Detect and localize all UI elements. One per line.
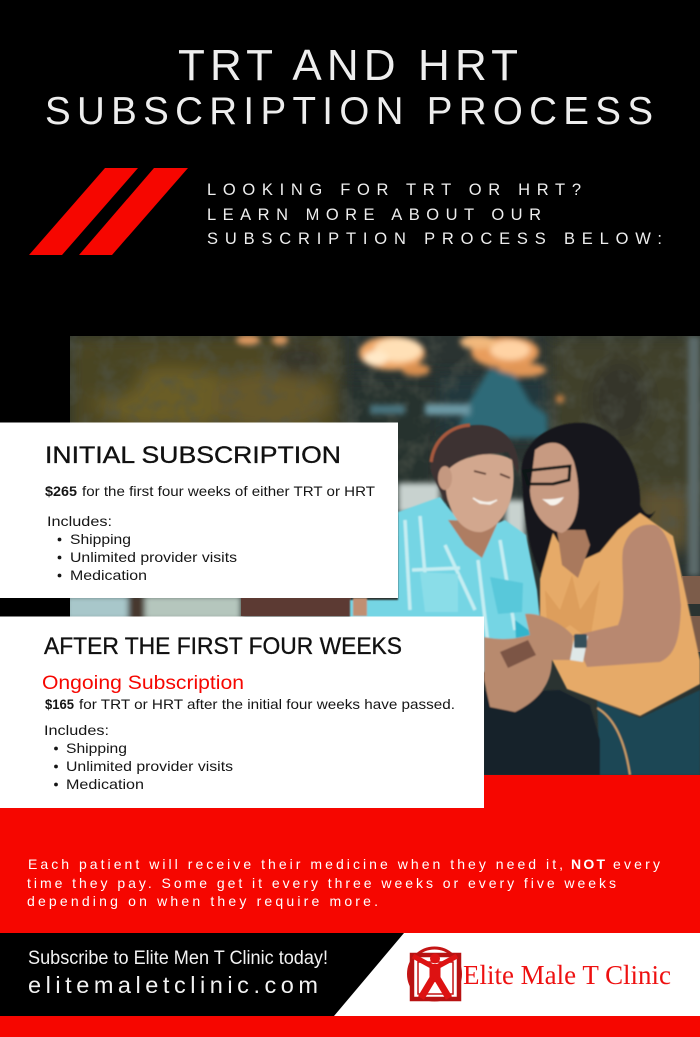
subtitle xyxy=(207,181,662,248)
panel: initial subscription xyxy=(0,422,398,598)
price line: $165 xyxy=(45,696,74,712)
note: medicine timing: NOT xyxy=(571,856,605,872)
includes list: Medication xyxy=(70,567,147,583)
includes list: Shipping xyxy=(70,531,131,547)
panel: after the first four weeks xyxy=(0,616,484,808)
watch xyxy=(570,634,588,662)
right jeans xyxy=(597,690,700,775)
subtitle: LEARN MORE ABOUT OUR xyxy=(207,206,541,224)
includes list: Shipping xyxy=(66,740,127,756)
hands xyxy=(484,614,573,712)
includes list: Includes: xyxy=(47,513,112,529)
right woman face xyxy=(530,443,578,533)
icon: red diagonal stripes xyxy=(29,168,188,255)
left woman neck xyxy=(448,520,498,558)
subtitle: LOOKING FOR TRT OR HRT? xyxy=(207,181,581,199)
price line: for TRT or HRT after the initial four weeks have passed. xyxy=(79,696,455,712)
note: medicine timing: depending on when they require more. xyxy=(27,893,378,909)
right woman hair xyxy=(521,423,656,585)
footer red band xyxy=(0,775,700,1037)
right woman neck xyxy=(557,530,590,578)
note: medicine timing: every xyxy=(613,856,660,872)
title xyxy=(45,41,653,133)
includes list xyxy=(44,722,233,792)
left woman shirt xyxy=(350,497,542,672)
heading: initial subscription: INITIAL SUBSCRIPTION xyxy=(45,442,341,469)
website: elitemaletclinic.com xyxy=(28,972,318,998)
includes list: Unlimited provider visits xyxy=(70,549,237,565)
title: SUBSCRIPTION PROCESS xyxy=(45,90,653,133)
footer: white logo area xyxy=(334,933,700,1016)
price line: $265 xyxy=(45,483,77,499)
bench xyxy=(682,576,700,652)
right woman arm xyxy=(573,525,681,667)
includes list xyxy=(47,513,237,583)
includes list: Medication xyxy=(66,776,144,792)
subscribe line: Subscribe to Elite Men T Clinic today! xyxy=(28,948,328,969)
subtitle: SUBSCRIPTION PROCESS BELOW: xyxy=(207,230,662,248)
includes list: Includes: xyxy=(44,722,109,738)
footer: black call to action xyxy=(0,933,700,1016)
left woman hair xyxy=(430,425,518,505)
price line: for the first four weeks of either TRT or HRT xyxy=(82,483,375,499)
note: medicine timing: Each patient will receive their medicine when they need it, xyxy=(28,856,563,872)
note: medicine timing: time they pay. Some get it every three weeks or every five weeks xyxy=(27,875,616,891)
logo text: Elite Male T Clinic xyxy=(463,960,671,990)
subheading: ongoing subscription: Ongoing Subscription xyxy=(42,672,244,694)
includes list: Unlimited provider visits xyxy=(66,758,233,774)
foliage texture xyxy=(70,336,700,536)
title: TRT AND HRT xyxy=(178,41,518,90)
photo: two women laughing on a bench xyxy=(66,335,700,775)
right woman top xyxy=(540,513,700,716)
note: medicine timing xyxy=(27,856,660,909)
icon: clinic logo xyxy=(408,948,460,1000)
left woman face xyxy=(446,454,514,532)
heading: after the first four weeks: AFTER THE FIRST FOUR WEEKS xyxy=(44,633,402,660)
